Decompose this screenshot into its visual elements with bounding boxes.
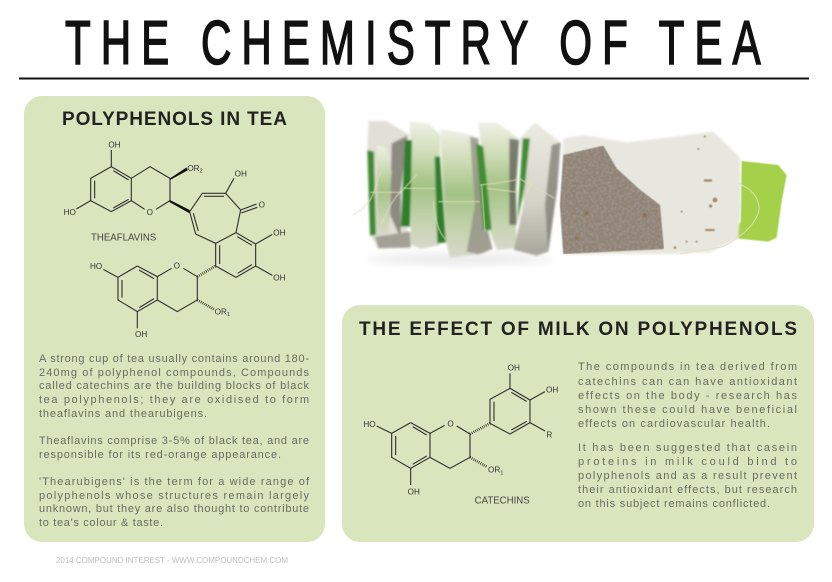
chemical structure: catechins: HO bbox=[363, 420, 376, 429]
chemical structure: theaflavins: O bbox=[259, 200, 265, 209]
chemical structure: theaflavins: OH bbox=[108, 140, 121, 149]
chemical structure: theaflavins: O bbox=[174, 262, 180, 271]
body text: milk: their antioxidant effects, but research bbox=[578, 484, 797, 496]
heading: polyphenols: POLYPHENOLS IN TEA bbox=[62, 109, 287, 130]
chemical structure: theaflavins: HO bbox=[90, 262, 102, 271]
photo shadow bbox=[367, 255, 553, 263]
body text: milk: proteins in milk could bind to bbox=[578, 456, 797, 468]
chemical structure: catechins: OH bbox=[546, 385, 558, 394]
body text: milk: It has been suggested that casein bbox=[578, 442, 797, 454]
body text: polyphenols: A strong cup of tea usually contains around 180- bbox=[39, 353, 309, 365]
title rule bbox=[19, 78, 809, 80]
body text: polyphenols: Theaflavins comprise 3-5% of black tea, and are bbox=[39, 435, 309, 447]
tea leaves bbox=[560, 146, 664, 254]
body text: polyphenols: unknown, but they are also thought to contribute bbox=[39, 503, 309, 515]
body text: polyphenols: theaflavins and thearubigens. bbox=[39, 408, 207, 420]
photo: tea bags bbox=[353, 121, 787, 263]
chemical structure: catechins: CATECHINS bbox=[475, 495, 530, 506]
title: THE CHEMISTRY OF TEA bbox=[65, 9, 761, 78]
chemical structure: catechins bbox=[363, 363, 558, 506]
chemical structure: catechins: R bbox=[546, 431, 552, 440]
body text: polyphenols: called catechins are the building blocks of black bbox=[39, 380, 310, 392]
panel background bbox=[24, 96, 325, 542]
tea flecks bbox=[575, 136, 717, 249]
chemical structure: catechins: 1 bbox=[500, 470, 503, 476]
chemical structure: theaflavins bbox=[64, 140, 286, 339]
chemical structure: catechins: OH bbox=[408, 488, 420, 497]
strings bbox=[353, 172, 555, 240]
body text: milk: effects on the body - research has bbox=[578, 390, 798, 402]
chemical structure: theaflavins: OH bbox=[273, 228, 286, 237]
body text: polyphenols: responsible for its red-orange appearance. bbox=[39, 449, 281, 461]
body text: milk: effects on cardiovascular health. bbox=[578, 418, 770, 430]
chemical structure: catechins: OR bbox=[488, 466, 500, 475]
chemical structure: theaflavins: OH bbox=[135, 330, 147, 339]
body text: milk: polyphenols and as a result prevent bbox=[578, 470, 797, 482]
panel: effect of milk bbox=[342, 305, 814, 542]
body text: polyphenols: tea polyphenols; they are oxidised to form bbox=[39, 394, 309, 406]
panel background bbox=[342, 305, 814, 542]
chemical structure: catechins: O bbox=[447, 420, 454, 429]
tag string bbox=[680, 183, 759, 254]
footer credit: 2014 COMPOUND INTEREST - WWW.COMPOUNDCHEM.COM bbox=[56, 556, 288, 565]
chemical structure: theaflavins: 2 bbox=[200, 169, 203, 175]
body text: milk: shown these could have beneficial bbox=[578, 404, 797, 416]
chemical structure: theaflavins: OR bbox=[215, 307, 227, 316]
tag bbox=[727, 161, 787, 242]
body text: milk: on this subject remains conflicted. bbox=[578, 498, 770, 510]
body text: polyphenols: 'Thearubigens' is the term for a wide range of bbox=[39, 476, 310, 488]
body text: milk: The compounds in tea derived from bbox=[578, 361, 797, 373]
chemical structure: theaflavins: OH bbox=[273, 274, 286, 283]
chemical structure: theaflavins: THEAFLAVINS bbox=[91, 232, 156, 243]
chemical structure: theaflavins: OR bbox=[187, 164, 200, 173]
body text: milk bbox=[578, 361, 798, 510]
heading: milk: THE EFFECT OF MILK ON POLYPHENOLS bbox=[359, 319, 797, 340]
chemical structure: theaflavins: 1 bbox=[227, 312, 230, 318]
body text: polyphenols: polyphenols whose structures remain largely bbox=[39, 490, 310, 502]
body text: polyphenols bbox=[39, 353, 310, 529]
body text: milk: catechins can can have antioxidant bbox=[578, 376, 797, 388]
chemical structure: catechins: OH bbox=[508, 363, 520, 372]
chemical structure: theaflavins: OH bbox=[235, 169, 247, 178]
panel: polyphenols in tea bbox=[24, 96, 325, 542]
body text: polyphenols: 240mg of polyphenol compounds, Compounds bbox=[39, 367, 310, 379]
unfolded bag bbox=[560, 132, 741, 255]
chemical structure: theaflavins: O bbox=[147, 208, 153, 217]
body text: polyphenols: to tea's colour & taste. bbox=[39, 517, 163, 529]
bag row: folded tea bags bbox=[367, 121, 561, 258]
chemical structure: theaflavins: HO bbox=[64, 208, 76, 217]
